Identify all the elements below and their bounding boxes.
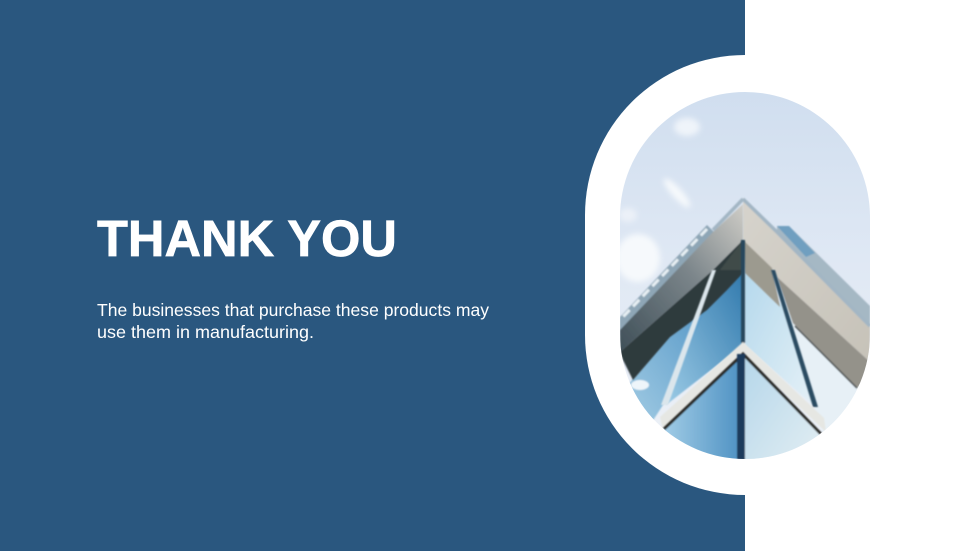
left facade (620, 199, 743, 380)
title: THANK YOU (97, 210, 397, 267)
blue background panel (0, 0, 745, 551)
white rounded cutout behind photo (585, 55, 905, 495)
clouds (616, 118, 700, 282)
photo: glass building against the sky (616, 92, 870, 470)
body text: use them in manufacturing. (97, 322, 314, 342)
lower window (662, 351, 822, 459)
window frames (660, 240, 826, 432)
right facade (743, 198, 870, 388)
glass panes (630, 273, 808, 420)
body text (97, 300, 489, 342)
body text: The businesses that purchase these products may (97, 300, 489, 320)
